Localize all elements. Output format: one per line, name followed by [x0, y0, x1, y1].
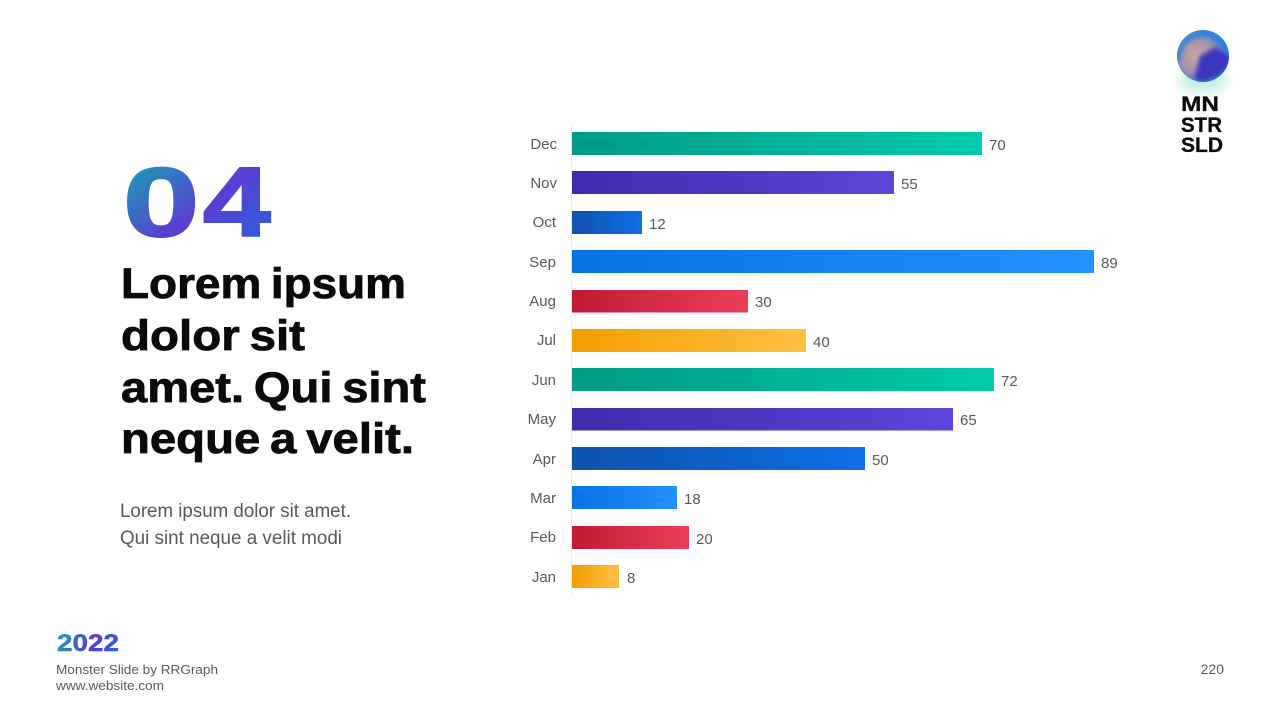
- bar: Dec 70: [530, 132, 1006, 155]
- footer year: 2022: [57, 629, 119, 657]
- bar: Jun 72: [532, 368, 1018, 391]
- bar: May 65: [528, 408, 977, 430]
- bar: May 65: 65: [960, 412, 977, 429]
- footer credits: [55, 662, 218, 693]
- logo wordmark: [1181, 93, 1223, 157]
- bar: Jul 40: 40: [813, 334, 830, 351]
- headline: amet. Qui sint: [121, 364, 426, 412]
- bar: Jun 72: 72: [1001, 373, 1018, 390]
- bar: Jan 8: 8: [627, 570, 635, 587]
- headline: neque a velit.: [121, 415, 414, 463]
- bar: Aug 30: 30: [755, 294, 772, 311]
- bar: Sep 89: Sep: [529, 254, 556, 271]
- bar: Aug 30: [529, 290, 772, 312]
- bar: Oct 12: [533, 211, 666, 234]
- bar: Oct 12: Oct: [533, 214, 557, 231]
- bar: Jul 40: Jul: [537, 332, 556, 349]
- bar: Jun 72: Jun: [532, 372, 556, 389]
- logo wordmark: SLD: [1181, 134, 1223, 157]
- icon: gradient sphere: [1177, 30, 1232, 92]
- bar: Mar 18: Mar: [530, 490, 556, 507]
- bar: Mar 18: 18: [684, 491, 701, 508]
- description text: Lorem ipsum dolor sit amet.: [120, 501, 351, 522]
- big number 04: 0: [123, 148, 199, 257]
- headline: dolor sit: [121, 312, 305, 360]
- bar: Dec 70: 70: [989, 137, 1006, 154]
- bar: Feb 20: 20: [696, 531, 713, 548]
- headline: Lorem ipsum: [121, 260, 406, 308]
- page number: 220: [1201, 661, 1224, 677]
- logo: [1177, 30, 1232, 157]
- bar: Nov 55: 55: [901, 176, 918, 193]
- bar: Mar 18: [530, 486, 701, 509]
- bar: Oct 12: 12: [649, 216, 666, 233]
- bar: Feb 20: [530, 526, 713, 549]
- footer credits: Monster Slide by RRGraph: [56, 662, 218, 677]
- description text: [120, 501, 351, 549]
- bar: Sep 89: [529, 250, 1118, 273]
- bar: Apr 50: Apr: [533, 451, 556, 468]
- bar: May 65: May: [528, 411, 556, 428]
- bar: Aug 30: Aug: [529, 293, 556, 310]
- bar: Apr 50: 50: [872, 452, 889, 469]
- bar: Dec 70: Dec: [530, 136, 557, 153]
- big number 04: 4: [203, 148, 271, 257]
- big number 04: [123, 148, 271, 257]
- bar: Feb 20: Feb: [530, 529, 556, 546]
- bar: Jul 40: [537, 329, 830, 352]
- headline: [121, 260, 426, 463]
- bar: Nov 55: [530, 171, 918, 194]
- bar: Jan 8: Jan: [532, 569, 556, 586]
- description text: Qui sint neque a velit modi: [120, 528, 342, 549]
- bar: Jan 8: [532, 565, 635, 588]
- bar chart: [528, 123, 1118, 597]
- footer credits: www.website.com: [55, 678, 164, 693]
- bar: Apr 50: [533, 447, 889, 470]
- logo wordmark: STR: [1181, 114, 1222, 137]
- logo wordmark: MN: [1181, 93, 1219, 116]
- bar: Sep 89: 89: [1101, 255, 1118, 272]
- bar: Nov 55: Nov: [530, 175, 557, 192]
